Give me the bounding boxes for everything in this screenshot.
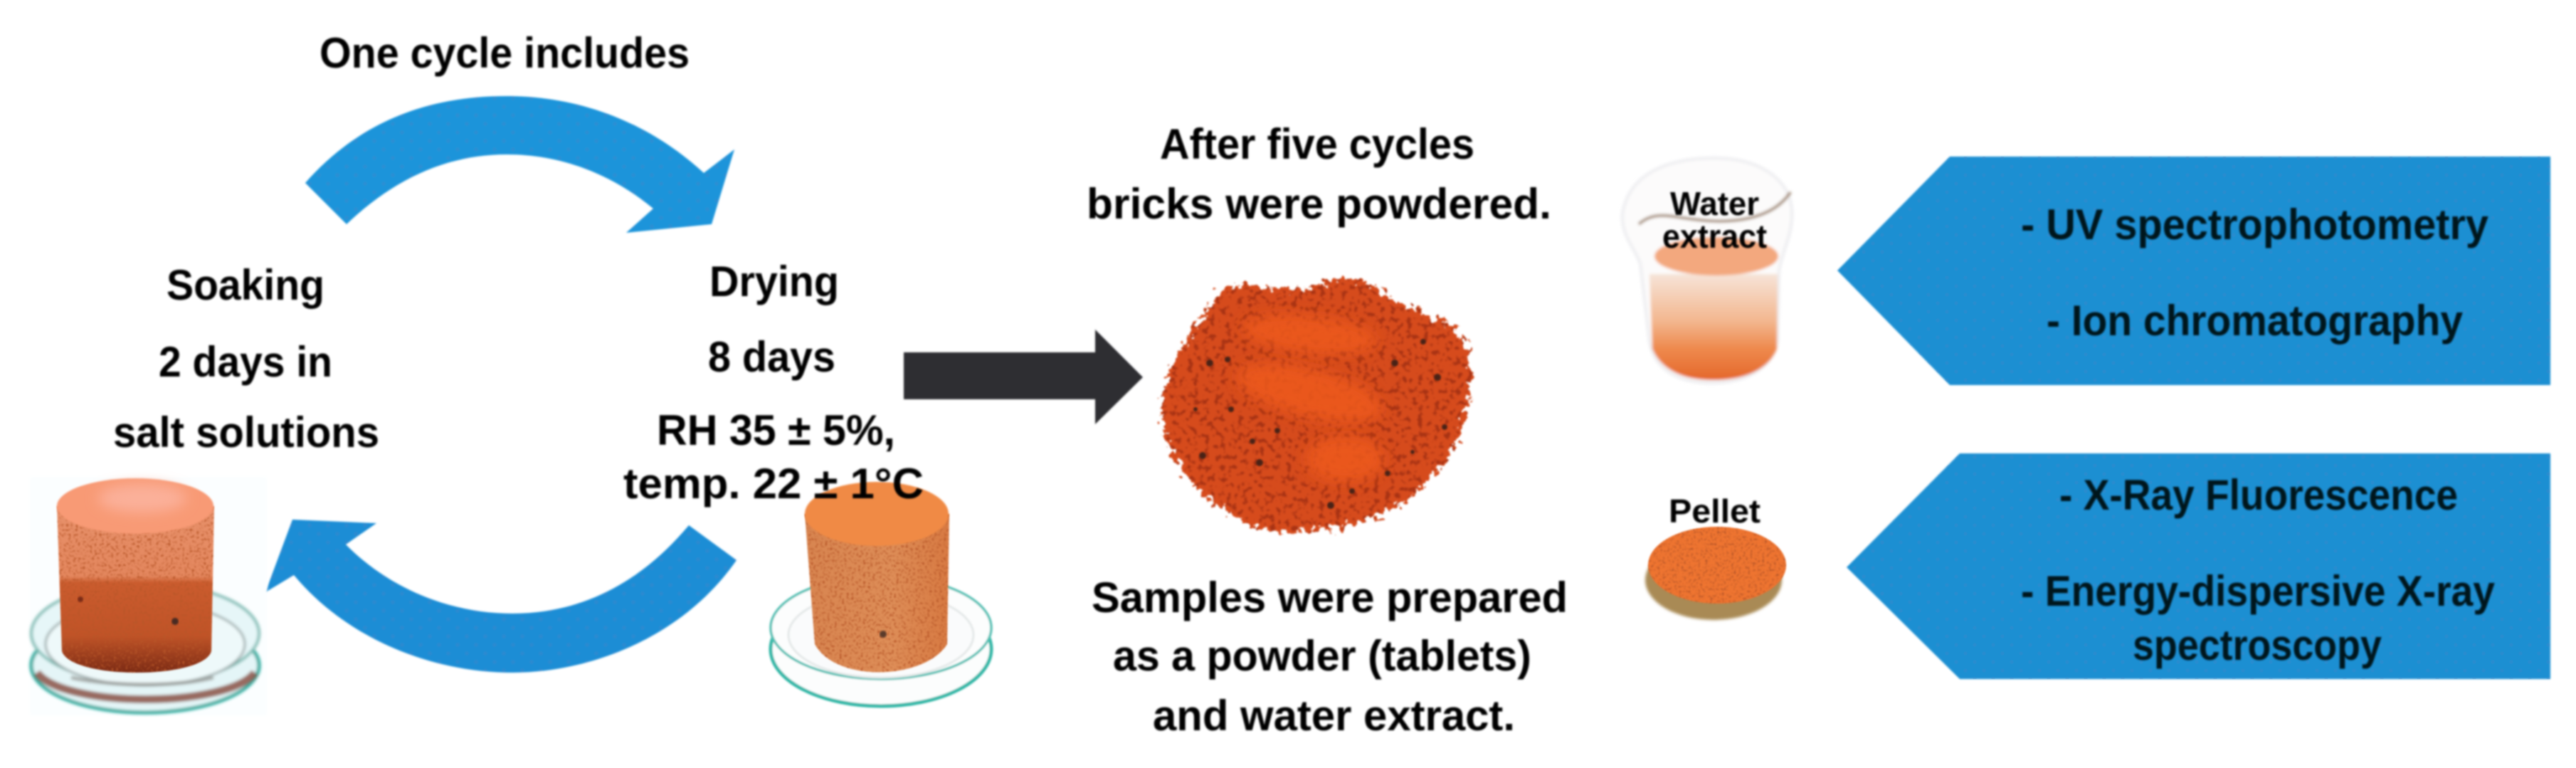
text block: drying: 8 days <box>708 333 835 381</box>
image: beaker of water extract <box>1622 158 1792 383</box>
image: pellet: Pellet <box>1669 493 1761 530</box>
text block: samples prepared: and water extract. <box>1153 692 1515 740</box>
text block: after five cycles: bricks were powdered. <box>1087 180 1551 228</box>
text block: soaking <box>113 261 379 456</box>
panel: pellet methods: - Energy-dispersive X-ray <box>2021 567 2496 615</box>
arrow: drying back to soaking <box>265 520 737 673</box>
heading: one cycle includes: One cycle includes <box>320 29 690 77</box>
text block: samples prepared <box>1092 574 1568 740</box>
panel: water extract methods: - Ion chromatography <box>2047 297 2464 344</box>
text block: samples prepared: Samples were prepared <box>1092 574 1568 621</box>
panel: pellet methods <box>1847 453 2550 679</box>
panel: water extract methods <box>1837 157 2550 385</box>
image: beaker of water extract: Water <box>1670 185 1759 222</box>
panel: pellet methods: - X-Ray Fluorescence <box>2059 471 2458 519</box>
text block: after five cycles <box>1087 120 1551 228</box>
arrow: black process arrow <box>904 330 1143 424</box>
arrow: soaking to drying <box>305 96 734 233</box>
text block: drying: Drying <box>709 258 839 305</box>
panel: water extract methods: - UV spectrophotometry <box>2021 201 2489 248</box>
text block: soaking: Soaking <box>167 261 324 309</box>
image: brick drying in dish <box>771 482 991 706</box>
text block: soaking: salt solutions <box>113 409 379 456</box>
panel: pellet methods: spectroscopy <box>2133 621 2382 669</box>
text block: soaking: 2 days in <box>159 338 332 386</box>
image: beaker of water extract: extract <box>1662 218 1767 255</box>
text block: drying <box>657 258 895 454</box>
image: pellet <box>1645 493 1786 620</box>
text block: after five cycles: After five cycles <box>1160 120 1474 168</box>
text block: samples prepared: as a powder (tablets) <box>1113 632 1531 680</box>
image: brick powder pile <box>1161 280 1470 532</box>
text: temperature: temp. 22 ± 1°C <box>623 460 924 507</box>
image: brick soaking in dish <box>30 477 267 715</box>
text block: drying: RH 35 ± 5%, <box>657 406 895 454</box>
